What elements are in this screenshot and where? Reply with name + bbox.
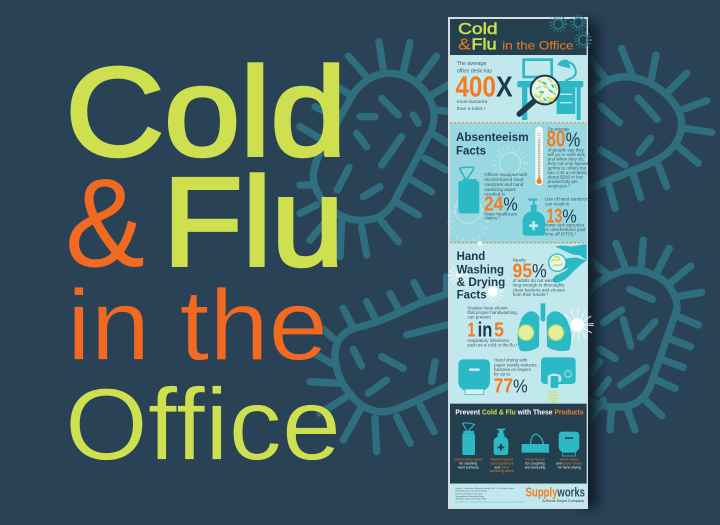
stat: 80 percent: productivity per <box>548 179 579 184</box>
products heading: Prevent Cold & Flu with These Products <box>455 409 584 416</box>
header panel: & <box>458 37 471 54</box>
stat: 95 percent: of adults do not wash <box>513 278 556 283</box>
white splats <box>452 241 589 336</box>
stat: 13 percent: or unscheduled paid <box>545 227 586 232</box>
stat: 77 percent: % <box>513 376 528 397</box>
stat: 1 in 5: 5 <box>494 319 504 342</box>
stat: 95 percent: % <box>532 262 547 283</box>
stat: 80 percent: can cost a company <box>548 170 588 175</box>
stat: 80 percent: will go to work sick, <box>548 152 586 157</box>
stat: 13 percent: % <box>562 205 577 226</box>
logo: SupplyWorks: A Home Depot Company <box>542 498 584 503</box>
product: wipes: for cleaning <box>459 461 477 465</box>
section: absenteeism facts: Facts <box>456 143 486 157</box>
icon: thermometer <box>535 127 543 185</box>
stat: 80 percent: 80 <box>547 126 565 152</box>
footer <box>450 484 587 507</box>
stat: 95 percent: from their hands.⁵ <box>513 292 548 297</box>
stat: 80 percent: employee.² <box>548 184 570 189</box>
stat: 24 percent: sanitizers and hand <box>484 182 524 187</box>
product: hand towels: for hand drying <box>558 465 581 469</box>
stat: 80 percent: of people say they <box>548 147 585 152</box>
product: facial tissue: and sneezing <box>525 465 545 469</box>
virus: lower centre <box>310 277 510 452</box>
product: wipes: Disinfecting wipes <box>454 458 483 462</box>
product: hand towels <box>556 432 583 469</box>
title words: in the: in the <box>67 269 328 381</box>
title word: Cold: Cold <box>66 41 346 182</box>
faint viruses <box>450 148 570 240</box>
logo: SupplyWorks: Supplyworks <box>526 486 585 500</box>
stat: 80 percent <box>547 126 589 189</box>
footnotes: ²Kimberly-Clark Corporate Study <box>455 490 487 493</box>
desk text: The average <box>457 61 487 67</box>
stat: 13 percent: fewer sick episodes <box>545 223 585 228</box>
stat: 1 in 5: such as a cold or the flu.⁶ <box>467 343 518 348</box>
stat: 1 in 5: respiratory infections, <box>467 338 510 343</box>
product: sanitizer: sanitizing wipes <box>489 469 514 473</box>
stat: 77 percent: bacteria on fingers <box>494 367 532 372</box>
product: sanitizer <box>489 429 514 473</box>
stat: 95 percent: 95 <box>513 260 532 283</box>
product: facial tissue: for coughing <box>525 461 545 465</box>
icon: magnifying glass <box>519 76 559 114</box>
product: hand towels: and paper towels <box>556 461 583 465</box>
header panel: Flu <box>471 37 497 54</box>
header panel: in the Office <box>502 39 574 52</box>
absenteeism heading: Absenteeism <box>456 130 529 144</box>
icon: lungs <box>518 303 571 351</box>
stat: 24 percent: resulted in <box>484 192 506 197</box>
icon: sanitizer bottle <box>523 199 545 236</box>
stat: 95 percent: clean bacteria and viruses <box>513 287 566 292</box>
virus: upper right <box>570 48 712 208</box>
product: sanitizer: Alcohol-based <box>491 458 513 462</box>
big title: Cold & Flu in the Office <box>65 41 346 482</box>
icon: towel dispenser <box>458 359 490 395</box>
header panel <box>450 16 591 55</box>
stat: 24 percent: claims.³ <box>484 216 500 221</box>
product: facial tissue <box>522 434 549 469</box>
stat: 1 in 5: Studies have shown <box>467 305 508 310</box>
section: desk statistic <box>455 60 583 120</box>
stat: 80 percent: % <box>566 130 580 152</box>
section: desk statistic: than a toilet.¹ <box>457 106 486 112</box>
stat: 80 percent: they not only spread <box>548 161 589 166</box>
stat: 13 percent: can result in <box>545 201 570 206</box>
stat: 13 percent <box>545 196 590 236</box>
infographic poster <box>448 16 591 509</box>
product: hand towels: Hand towels <box>560 458 579 462</box>
product: sanitizer: hand sanitizers <box>490 461 514 465</box>
stat: 77 percent <box>494 358 537 398</box>
stat: 95 percent: Nearly <box>513 257 526 262</box>
stat: 24 percent: sanitizing wipes <box>484 187 516 192</box>
icon: desk, monitor and lamp <box>517 60 583 120</box>
stat: 1 in 5: 1 <box>467 319 475 342</box>
product: wipes <box>454 423 483 469</box>
stat: 24 percent: fewer healthcare <box>484 211 518 216</box>
footnotes: ³Journal of Hospital Infection <box>455 492 483 495</box>
icon: washing hands <box>549 244 587 283</box>
section: absenteeism facts <box>450 123 590 243</box>
section: hand washing and drying facts <box>452 241 589 402</box>
stat: 13 percent: 13 <box>546 205 562 227</box>
header viruses <box>551 16 591 47</box>
footnotes <box>455 487 526 503</box>
title word: Office: Office <box>65 368 341 482</box>
stat: 80 percent: germs to others but <box>548 165 587 170</box>
virus: top centre <box>300 42 448 257</box>
stat: 80 percent: about $280 in lost <box>548 174 584 179</box>
footnotes: ¹Source: University of Arizona Study, 2012; Dr. Charles Gerba <box>455 487 515 490</box>
stat: 1 in 5 <box>467 305 518 348</box>
stat: 77 percent: by up to <box>494 372 510 377</box>
section: desk statistic: X <box>496 72 513 104</box>
icon: wipes container <box>458 167 479 213</box>
stat: 13 percent: Use of hand sanitizers <box>545 196 590 201</box>
stat: 24 percent: 24 <box>484 194 503 216</box>
header title text: Cold <box>458 21 498 38</box>
product: wipes: hard surfaces <box>458 465 479 469</box>
section: desk statistic: 400 <box>455 72 496 104</box>
stat: 1 in 5: can prevent <box>467 315 492 320</box>
section: prevent products <box>450 404 587 484</box>
product: sanitizer: and hand <box>494 465 509 469</box>
stat: 77 percent: Hand drying with <box>494 358 528 363</box>
hand washing heading: Hand <box>457 249 485 263</box>
stat: 24 percent <box>484 172 528 221</box>
product: facial tissue: Facial tissue <box>525 458 545 462</box>
stat: 80 percent: On average <box>548 126 570 131</box>
footnotes: ⁴Georgetown University Study <box>455 495 485 498</box>
stat: 24 percent: alcohol-based hand <box>484 177 524 182</box>
title word: Flu: Flu <box>163 151 344 292</box>
section: hand washing and drying facts: & Drying <box>457 275 505 289</box>
icon: hand dryer <box>541 357 576 402</box>
virus: lower right <box>570 240 702 430</box>
stat: 77 percent: 77 <box>494 376 513 398</box>
section: desk statistic: office desk has <box>457 68 492 74</box>
section: hand washing and drying facts: Facts <box>457 288 487 302</box>
footnotes: ⁵Michigan State University Study <box>455 498 487 501</box>
stat: 13 percent: time off (PTO).⁴ <box>545 231 576 236</box>
stat: 77 percent: paper towels reduces <box>494 362 537 367</box>
footnotes: http://www.cdc.gov/handwashing/show-me-the-science-handwashing.html <box>455 500 526 503</box>
stat: 95 percent: long enough to thoroughly <box>513 283 565 288</box>
stat: 95 percent <box>513 257 566 297</box>
stat: 1 in 5: that proper handwashing <box>467 310 517 315</box>
stat: 1 in 5: in <box>478 319 492 342</box>
stat: 24 percent: Offices equipped with <box>484 172 528 177</box>
title ampersand: & <box>65 152 145 294</box>
section: hand washing and drying facts: Washing <box>457 262 504 276</box>
stat: 24 percent: % <box>503 194 518 215</box>
stat: 80 percent: and when they do, <box>548 156 584 161</box>
poster shadow <box>578 22 598 508</box>
section: desk statistic: more bacteria <box>457 99 487 105</box>
